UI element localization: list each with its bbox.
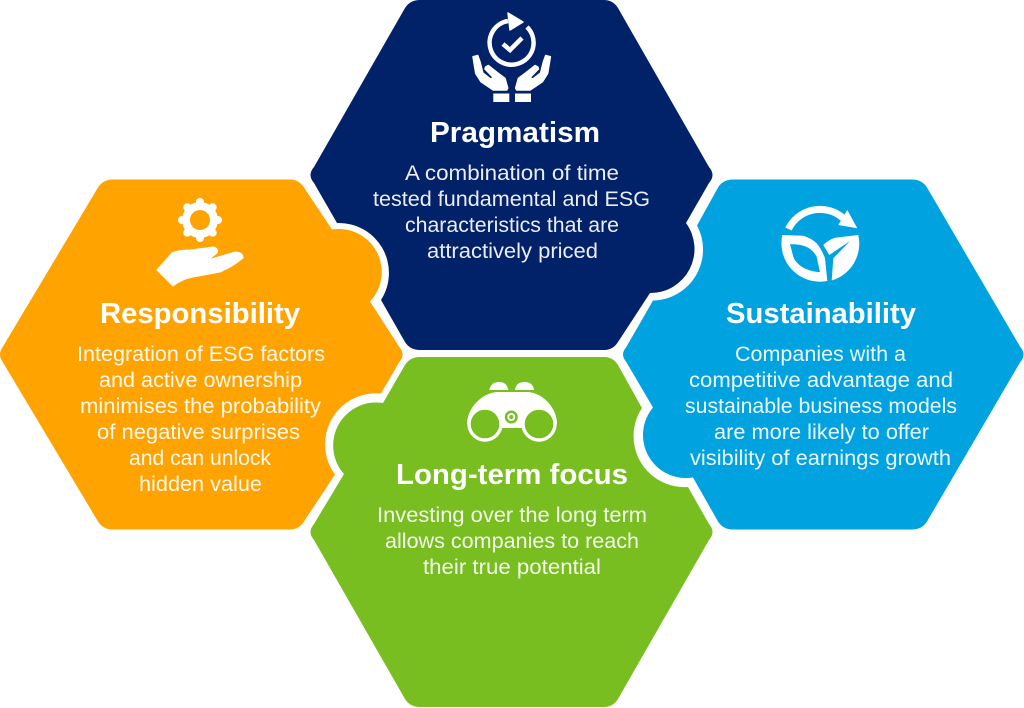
panel: pragmatism bbox=[310, 0, 712, 350]
text block: responsibility description: and can unlock bbox=[129, 447, 271, 470]
text block: sustainability description: Companies with a bbox=[735, 343, 906, 366]
panel: long-term focus bbox=[310, 357, 712, 707]
text block: responsibility description: Integration of ESG factors bbox=[77, 343, 325, 366]
text block: pragmatism description: characteristics that are bbox=[405, 214, 619, 237]
icon: binoculars bbox=[467, 382, 557, 442]
text block: sustainability description: are more likely to offer bbox=[714, 421, 929, 444]
orange hexagon bbox=[0, 180, 402, 530]
heading: Responsibility: Responsibility bbox=[100, 298, 300, 330]
heading: Sustainability: Sustainability bbox=[726, 298, 916, 330]
text block: responsibility description bbox=[77, 343, 325, 496]
text block: responsibility description: minimises the probability bbox=[80, 395, 322, 418]
text block: sustainability description: sustainable business models bbox=[685, 395, 957, 418]
navy hexagon bbox=[310, 0, 712, 350]
icon: hand holding gear bbox=[157, 202, 243, 286]
text block: long-term focus description: their true potential bbox=[423, 556, 601, 579]
text block: pragmatism description: tested fundamental and ESG bbox=[373, 188, 650, 211]
text block: long-term focus description: allows companies to reach bbox=[385, 530, 639, 553]
text block: sustainability description: competitive advantage and bbox=[689, 369, 953, 392]
panel: responsibility bbox=[0, 180, 402, 530]
text block: responsibility description: and active ownership bbox=[99, 369, 302, 392]
icon: hands holding check cycle bbox=[473, 13, 550, 102]
text block: responsibility description: hidden value bbox=[139, 473, 262, 496]
heading: Pragmatism: Pragmatism bbox=[430, 117, 600, 149]
text block: pragmatism description: A combination of time bbox=[405, 162, 619, 185]
icon: leaves in recycling arrow bbox=[781, 209, 859, 282]
heading: Long-term focus: Long-term focus bbox=[396, 459, 628, 491]
text block: responsibility description: of negative surprises bbox=[97, 421, 300, 444]
text block: sustainability description: visibility of earnings growth bbox=[690, 447, 951, 470]
panel: sustainability bbox=[623, 180, 1024, 530]
text block: pragmatism description bbox=[373, 162, 650, 263]
green hexagon bbox=[310, 357, 712, 707]
text block: pragmatism description: attractively priced bbox=[427, 240, 598, 263]
text block: long-term focus description: Investing over the long term bbox=[377, 504, 647, 527]
text block: sustainability description bbox=[685, 343, 957, 470]
text block: long-term focus description bbox=[377, 504, 647, 579]
blue hexagon bbox=[623, 180, 1024, 530]
